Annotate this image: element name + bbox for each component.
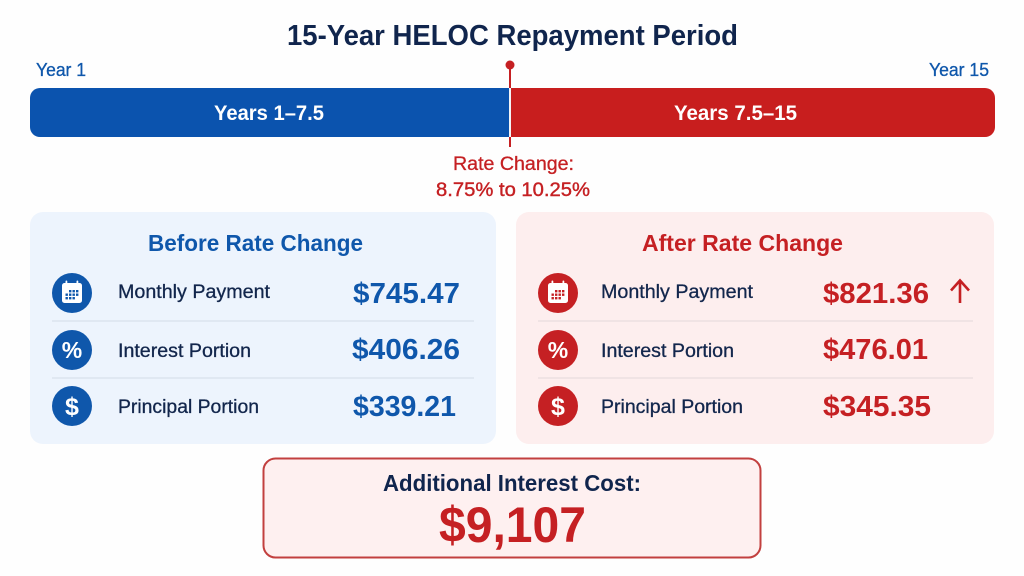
icon: percent: [538, 330, 578, 370]
heading: Before Rate Change: [148, 230, 363, 256]
icon: dollar: $: [65, 393, 79, 421]
callout box: [264, 458, 760, 558]
icon: calendar: [538, 273, 578, 313]
rate change callout: Rate Change:: [453, 154, 574, 175]
row label: principal portion: Principal Portion: [601, 397, 743, 418]
row label: principal portion: Principal Portion: [118, 397, 259, 418]
icon: percent: [52, 330, 92, 370]
callout label: Additional Interest Cost:: [383, 470, 641, 496]
row label: interest portion: Interest Portion: [601, 341, 734, 362]
rate change callout: [436, 154, 590, 201]
segment label: years 1-7.5: Years 1–7.5: [214, 102, 324, 125]
heading: After Rate Change: [642, 230, 843, 256]
timeline: [30, 60, 995, 201]
panel background: [30, 212, 496, 444]
rate change callout: 8.75% to 10.25%: [436, 180, 590, 201]
bar segment: years 1-7.5: [30, 88, 510, 137]
label: year 15: Year 15: [929, 60, 989, 80]
rate change marker: [506, 60, 514, 147]
icon: calendar: [52, 273, 92, 313]
panel: after rate change: [516, 212, 994, 444]
value: interest portion: $476.01: [823, 334, 928, 366]
icon: dollar: [52, 386, 92, 426]
callout: additional interest cost: [264, 458, 760, 558]
segment label: years 7.5-15: Years 7.5–15: [674, 102, 797, 125]
icon: percent: %: [548, 337, 568, 363]
value: interest portion: $406.26: [352, 334, 460, 366]
icon: percent: %: [62, 337, 82, 363]
row label: interest portion: Interest Portion: [118, 341, 251, 362]
value: principal portion: $339.21: [353, 391, 456, 423]
callout value: $9,107: [439, 497, 586, 553]
value: principal portion: $345.35: [823, 391, 931, 423]
title: 15-Year HELOC Repayment Period: [287, 20, 738, 52]
icon: dollar: [538, 386, 578, 426]
value: monthly payment: $821.36: [823, 278, 929, 310]
label: year 1: Year 1: [36, 60, 86, 80]
row label: monthly payment: Monthly Payment: [118, 282, 271, 303]
value: monthly payment: $745.47: [353, 278, 460, 310]
panel background: [516, 212, 994, 444]
icon: dollar: $: [551, 393, 565, 421]
arrow: increase: [951, 280, 969, 303]
bar segment: years 7.5-15: [510, 88, 995, 137]
panel: before rate change: [30, 212, 496, 444]
row label: monthly payment: Monthly Payment: [601, 282, 754, 303]
